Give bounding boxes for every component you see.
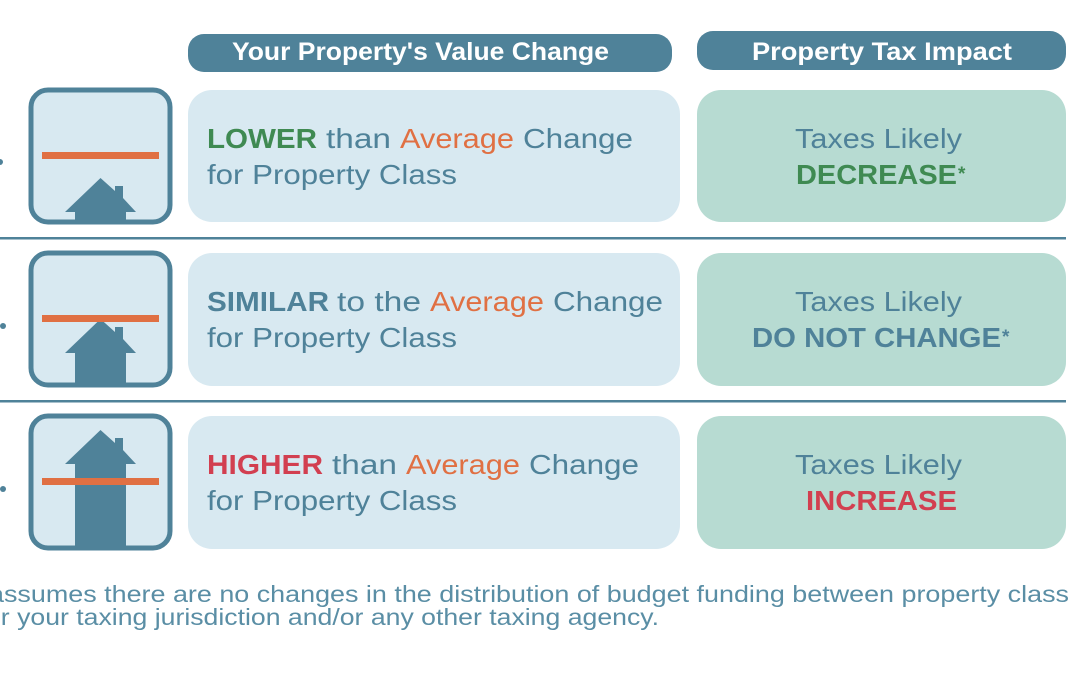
panel: taxes likely increase: INCREASE bbox=[806, 485, 957, 516]
header: property tax impact: Property Tax Impact bbox=[752, 38, 1013, 66]
footnote text: or your taxing jurisdiction and/or any other taxing agency. bbox=[0, 604, 659, 630]
icon: house above average line bbox=[31, 416, 170, 548]
panel: higher than average change: Average bbox=[406, 449, 520, 480]
panel: taxes likely do not change: Taxes Likely bbox=[795, 286, 962, 317]
panel: higher than average change: for Property Class bbox=[207, 485, 457, 516]
panel: taxes likely increase: Taxes Likely bbox=[795, 449, 962, 480]
footnote text bbox=[0, 581, 1069, 630]
header: your property's value change bbox=[188, 34, 672, 72]
panel: taxes likely decrease: * bbox=[958, 164, 966, 185]
panel: taxes likely do not change: DO NOT CHANGE bbox=[752, 322, 1001, 353]
panel: lower than average change: for Property Class bbox=[207, 159, 457, 190]
panel: lower than average change bbox=[188, 90, 680, 222]
header: property tax impact bbox=[697, 31, 1066, 70]
panel: taxes likely increase bbox=[697, 416, 1066, 549]
panel: taxes likely decrease bbox=[697, 90, 1066, 222]
header: your property's value change: Your Property's Value Change bbox=[232, 38, 609, 66]
panel: higher than average change: Change bbox=[529, 449, 639, 480]
panel: taxes likely decrease: Taxes Likely bbox=[795, 123, 962, 154]
panel: taxes likely do not change bbox=[697, 253, 1066, 386]
panel: lower than average change: than bbox=[326, 123, 391, 154]
panel: lower than average change: LOWER bbox=[207, 123, 317, 154]
panel: taxes likely decrease: DECREASE bbox=[796, 159, 957, 190]
panel: lower than average change: Average bbox=[400, 123, 514, 154]
panel: similar to the average change bbox=[188, 253, 680, 386]
panel: similar to the average change: to the bbox=[337, 286, 421, 317]
panel: higher than average change bbox=[188, 416, 680, 549]
footnote text: assumes there are no changes in the distribution of budget funding between property class bbox=[0, 581, 1069, 607]
panel: lower than average change: Change bbox=[523, 123, 633, 154]
icon: house at average line bbox=[31, 253, 170, 385]
panel: similar to the average change: Change bbox=[553, 286, 663, 317]
panel: similar to the average change: for Property Class bbox=[207, 322, 457, 353]
panel: higher than average change: HIGHER bbox=[207, 449, 323, 480]
row bullets bbox=[0, 159, 6, 492]
panel: taxes likely do not change: * bbox=[1002, 327, 1010, 348]
panel: higher than average change: than bbox=[332, 449, 397, 480]
panel: similar to the average change: Average bbox=[430, 286, 544, 317]
icon: house below average line bbox=[31, 90, 170, 222]
panel: similar to the average change: SIMILAR bbox=[207, 286, 329, 317]
row divider lines bbox=[0, 237, 1066, 402]
